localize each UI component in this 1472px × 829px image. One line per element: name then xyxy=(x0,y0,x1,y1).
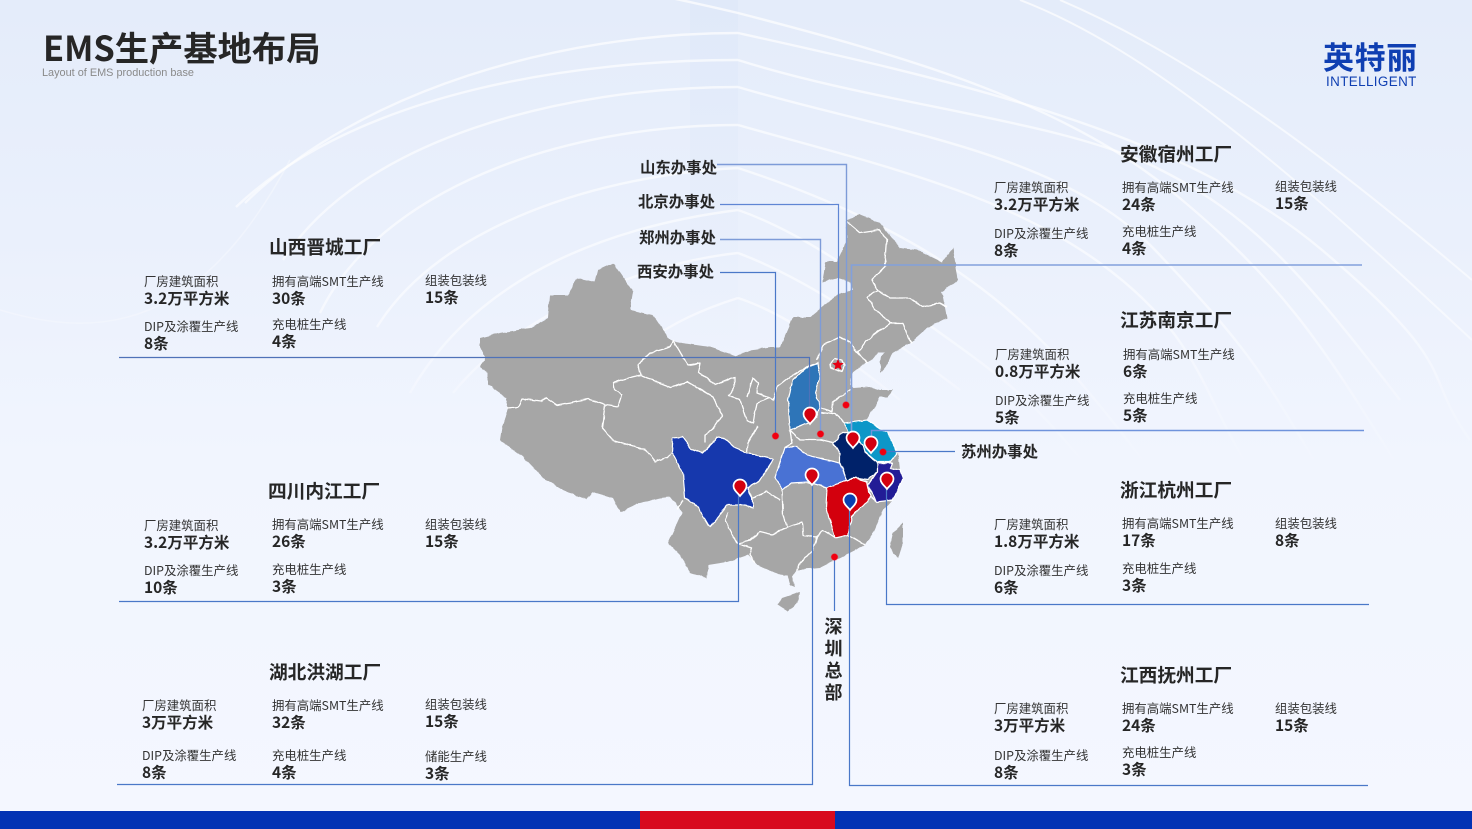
stat: charging pile lines xyxy=(272,746,346,783)
stat: energy storage lines xyxy=(425,747,487,784)
panel heading: 四川内江工厂 xyxy=(268,477,380,504)
map: province borders xyxy=(507,220,947,570)
stat: assembly lines: 组装包装线 xyxy=(425,271,487,289)
stat: DIP lines: 10条 xyxy=(144,576,178,598)
pin: Jiangsu xyxy=(864,436,878,453)
stat: assembly lines: 15条 xyxy=(1275,192,1309,214)
stat: SMT lines: 17条 xyxy=(1122,529,1156,551)
stat: energy storage lines: 储能生产线 xyxy=(425,747,487,765)
office marker: Shandong xyxy=(843,402,849,408)
map: grey landmass xyxy=(480,215,958,611)
stat: building area: 厂房建筑面积 xyxy=(144,516,218,534)
panel: Hubei Honghu factory xyxy=(142,658,487,784)
stat: building area xyxy=(995,345,1080,382)
stat: SMT lines xyxy=(272,696,384,733)
stat: building area xyxy=(142,696,216,733)
office marker: Beijing xyxy=(832,359,844,370)
stat: assembly lines xyxy=(1275,701,1337,735)
stat: assembly lines: 组装包装线 xyxy=(1275,514,1337,532)
panel heading: 浙江杭州工厂 xyxy=(1120,476,1232,503)
stat: charging pile lines: 3条 xyxy=(272,575,297,597)
stat: building area: 厂房建筑面积 xyxy=(995,345,1069,363)
province: Jiangxi xyxy=(826,478,871,538)
pin: Anhui xyxy=(846,432,860,448)
label: Suzhou office: 苏州办事处 xyxy=(961,440,1038,462)
stat: charging pile lines: 充电桩生产线 xyxy=(272,315,346,333)
stat: assembly lines: 15条 xyxy=(425,286,459,308)
label: Xi'an office: 西安办事处 xyxy=(637,260,714,282)
stat: building area: 3.2万平方米 xyxy=(144,287,229,309)
stat: assembly lines: 15条 xyxy=(425,530,459,552)
province: Zhejiang xyxy=(868,463,903,502)
stat: charging pile lines xyxy=(1122,559,1196,596)
stat: charging pile lines xyxy=(1122,745,1196,779)
stat: DIP lines: 8条 xyxy=(994,761,1019,783)
office marker: Xi'an xyxy=(772,433,779,439)
stat: assembly lines xyxy=(1275,514,1337,551)
stat: assembly lines xyxy=(425,695,487,732)
panel: Jiangxi Fuzhou factory xyxy=(994,661,1337,783)
stat: SMT lines xyxy=(272,515,384,552)
pin: Sichuan xyxy=(734,480,746,496)
stat: DIP lines: DIP及涂覆生产线 xyxy=(144,317,238,335)
stat: assembly lines: 15条 xyxy=(425,710,459,732)
panel heading: 安徽宿州工厂 xyxy=(1120,140,1232,167)
stat: SMT lines: 拥有高端SMT生产线 xyxy=(1123,345,1235,363)
stat: charging pile lines: 4条 xyxy=(1122,237,1147,259)
stat: DIP lines xyxy=(144,317,238,354)
stat: assembly lines: 15条 xyxy=(1275,714,1309,736)
stat: charging pile lines: 充电桩生产线 xyxy=(1122,559,1196,577)
stat: SMT lines xyxy=(272,272,384,309)
stat: SMT lines: 拥有高端SMT生产线 xyxy=(1122,699,1234,717)
stat: SMT lines xyxy=(1122,514,1234,551)
stat: charging pile lines: 充电桩生产线 xyxy=(1122,222,1196,240)
stat: building area xyxy=(994,515,1079,552)
panel: Anhui Suzhou factory xyxy=(994,140,1337,261)
footer red segment xyxy=(640,811,835,829)
stat: charging pile lines xyxy=(1122,222,1196,259)
stat: DIP lines: DIP及涂覆生产线 xyxy=(995,391,1089,409)
stat: assembly lines: 组装包装线 xyxy=(425,695,487,713)
label: Zhengzhou office: 郑州办事处 xyxy=(639,226,716,248)
stat: charging pile lines xyxy=(272,315,346,352)
stat: SMT lines: 30条 xyxy=(272,287,306,309)
stat: building area: 0.8万平方米 xyxy=(995,360,1080,382)
panel heading: 山西晋城工厂 xyxy=(269,233,381,260)
stat: SMT lines: 6条 xyxy=(1123,360,1148,382)
panel: Sichuan Neijiang factory xyxy=(144,477,487,598)
stat: assembly lines: 组装包装线 xyxy=(1275,699,1337,717)
stat: SMT lines: 26条 xyxy=(272,530,306,552)
stat: DIP lines: DIP及涂覆生产线 xyxy=(142,746,236,764)
province: Sichuan xyxy=(672,437,773,527)
stat: charging pile lines: 3条 xyxy=(1122,758,1147,780)
stat: charging pile lines: 充电桩生产线 xyxy=(1123,389,1197,407)
stat: charging pile lines: 4条 xyxy=(272,330,297,352)
stat: building area: 厂房建筑面积 xyxy=(994,699,1068,717)
stat: charging pile lines: 3条 xyxy=(1122,574,1147,596)
stat: DIP lines: 8条 xyxy=(994,239,1019,261)
office marker: Zhengzhou xyxy=(817,431,824,437)
stat: SMT lines xyxy=(1123,345,1235,382)
stat: SMT lines: 32条 xyxy=(272,711,306,733)
stat: charging pile lines: 4条 xyxy=(272,761,297,783)
stat: DIP lines xyxy=(994,224,1088,261)
stat: building area: 3万平方米 xyxy=(142,711,213,733)
stat: DIP lines xyxy=(994,748,1088,782)
stat: DIP lines xyxy=(144,561,238,598)
stat: DIP lines xyxy=(994,561,1088,598)
footer bar xyxy=(0,811,1472,829)
stat: SMT lines: 24条 xyxy=(1122,714,1156,736)
stat: assembly lines xyxy=(1275,177,1337,214)
stat: energy storage lines: 3条 xyxy=(425,762,450,784)
label: Shenzhen headquarters: 深圳总部 xyxy=(824,613,842,705)
pin: Hubei xyxy=(806,468,818,485)
label: Beijing office: 北京办事处 xyxy=(638,190,715,212)
title: EMS生产基地布局 xyxy=(43,21,321,71)
stat: SMT lines: 24条 xyxy=(1122,193,1156,215)
stat: assembly lines xyxy=(425,515,487,552)
stat: DIP lines: 8条 xyxy=(144,332,169,354)
province: Jiangsu xyxy=(845,420,898,462)
province: Hubei xyxy=(775,447,847,490)
stat: SMT lines xyxy=(1122,699,1234,736)
stat: SMT lines: 拥有高端SMT生产线 xyxy=(272,272,384,290)
stat: building area: 3.2万平方米 xyxy=(144,531,229,553)
stat: SMT lines: 拥有高端SMT生产线 xyxy=(1122,514,1234,532)
logo: INTELLIGENT xyxy=(1326,74,1417,89)
stat: SMT lines: 拥有高端SMT生产线 xyxy=(272,515,384,533)
panel: Jiangsu Nanjing factory xyxy=(995,306,1235,428)
panel heading: 江苏南京工厂 xyxy=(1120,306,1232,333)
stat: DIP lines: DIP及涂覆生产线 xyxy=(144,561,238,579)
stat: DIP lines: DIP及涂覆生产线 xyxy=(994,746,1088,764)
panel heading: 湖北洪湖工厂 xyxy=(269,658,381,685)
stat: building area: 3万平方米 xyxy=(994,714,1065,736)
stat: DIP lines: DIP及涂覆生产线 xyxy=(994,561,1088,579)
stat: building area: 厂房建筑面积 xyxy=(994,515,1068,533)
stat: SMT lines: 拥有高端SMT生产线 xyxy=(1122,178,1234,196)
office marker: Shenzhen xyxy=(831,554,838,560)
stat: charging pile lines: 充电桩生产线 xyxy=(1122,743,1196,761)
stat: building area: 1.8万平方米 xyxy=(994,530,1079,552)
map shapes xyxy=(480,215,958,611)
pin: Shanxi xyxy=(804,408,816,424)
stat: building area: 厂房建筑面积 xyxy=(144,272,218,290)
stat: building area xyxy=(994,178,1079,215)
panel: Shanxi Jincheng factory xyxy=(144,233,487,354)
stat: DIP lines xyxy=(995,391,1089,428)
leader lines xyxy=(117,164,1369,786)
province: Shanxi xyxy=(788,363,820,430)
pin: Zhejiang xyxy=(880,472,894,489)
panel heading: 江西抚州工厂 xyxy=(1120,661,1232,688)
stat: assembly lines: 组装包装线 xyxy=(1275,177,1337,195)
pin: Jiangxi xyxy=(844,494,856,510)
stat: DIP lines: 6条 xyxy=(994,576,1019,598)
stat: building area xyxy=(144,272,229,309)
subtitle: Layout of EMS production base xyxy=(42,67,194,79)
stat: building area: 厂房建筑面积 xyxy=(142,696,216,714)
stat: charging pile lines: 5条 xyxy=(1123,404,1148,426)
stat: assembly lines: 组装包装线 xyxy=(425,515,487,533)
stat: building area xyxy=(144,516,229,553)
stat: DIP lines: 5条 xyxy=(995,406,1020,428)
stat: DIP lines xyxy=(142,746,236,783)
stat: charging pile lines xyxy=(1123,389,1197,426)
logo: 英特丽 xyxy=(1323,33,1418,78)
office marker: Suzhou xyxy=(880,449,886,455)
stat: DIP lines: 8条 xyxy=(142,761,167,783)
stat: SMT lines: 拥有高端SMT生产线 xyxy=(272,696,384,714)
panel: Zhejiang Hangzhou factory xyxy=(994,476,1337,598)
stat: charging pile lines: 充电桩生产线 xyxy=(272,560,346,578)
label: Shandong office: 山东办事处 xyxy=(640,156,717,178)
stat: DIP lines: DIP及涂覆生产线 xyxy=(994,224,1088,242)
stat: SMT lines xyxy=(1122,178,1234,215)
stat: assembly lines xyxy=(425,271,487,308)
stat: assembly lines: 8条 xyxy=(1275,529,1300,551)
stat: building area xyxy=(994,699,1068,736)
province: Anhui xyxy=(833,433,877,480)
stat: building area: 厂房建筑面积 xyxy=(994,178,1068,196)
stat: building area: 3.2万平方米 xyxy=(994,193,1079,215)
stat: charging pile lines xyxy=(272,560,346,597)
stat: charging pile lines: 充电桩生产线 xyxy=(272,746,346,764)
